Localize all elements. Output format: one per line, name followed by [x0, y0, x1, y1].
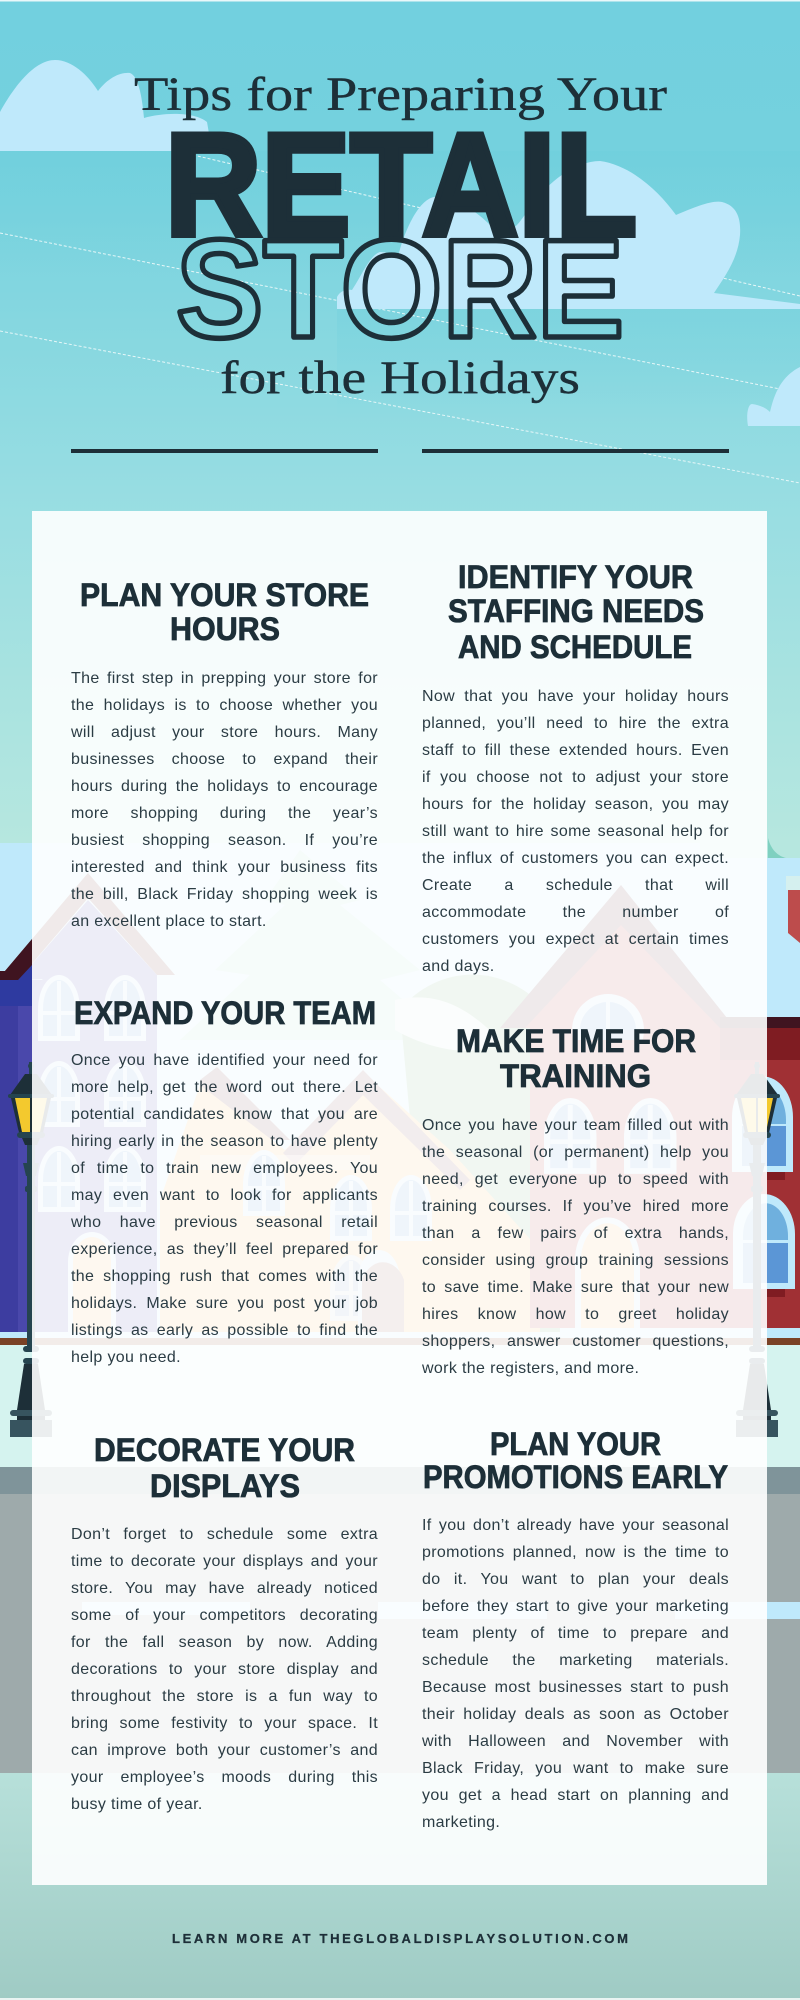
body text: the influx of customers you can expect. — [422, 850, 729, 867]
body text: schedule the marketing materials. — [422, 1652, 729, 1669]
body text — [422, 688, 729, 975]
body text: accommodate the number of — [422, 904, 729, 921]
body text: experience, as they’ll feel prepared for — [71, 1241, 378, 1258]
body text: you get a head start on planning and — [422, 1787, 729, 1804]
right windows — [732, 1076, 795, 1297]
heading: AND SCHEDULE — [458, 629, 692, 665]
body text: can improve both your customer’s and — [71, 1742, 378, 1759]
section: expand your team — [71, 995, 378, 1366]
body text — [71, 1526, 378, 1813]
body text: if you choose not to adjust your store — [422, 769, 729, 786]
body text — [71, 670, 378, 930]
body text: before they start to give your marketing — [422, 1598, 729, 1615]
body text: and days. — [422, 958, 495, 975]
street lamp: right — [734, 1062, 780, 1437]
body text: consider using group training sessions — [422, 1252, 729, 1269]
body text: Black Friday, you want to make sure — [422, 1760, 729, 1777]
green tree — [400, 975, 560, 1335]
body text: the holidays is to choose whether you — [71, 697, 378, 714]
cloud: upper left — [0, 60, 212, 151]
body text: than a few pairs of extra hands, — [422, 1225, 729, 1242]
body text: to save time. Make sure that your new — [422, 1279, 729, 1296]
body text: bring some festivity to your space. It — [71, 1715, 378, 1732]
body text: interested and think your business fits — [71, 859, 378, 876]
body text: busiest shopping season. If you’re — [71, 832, 378, 849]
title block — [71, 68, 729, 453]
body text: hires know how to greet holiday — [422, 1306, 729, 1323]
section: make time for training — [422, 1023, 729, 1377]
heading: STAFFING NEEDS — [448, 593, 704, 629]
body text: do it. You want to plan your deals — [422, 1571, 729, 1588]
body text: Create a schedule that will — [422, 877, 729, 894]
blue house — [0, 873, 175, 1332]
cloud: right edge — [747, 367, 800, 426]
body text: who have previous seasonal retail — [71, 1214, 378, 1231]
body text: the seasonal (or permanent) help you — [422, 1144, 729, 1161]
heading: HOURS — [170, 611, 280, 647]
body text: work the registers, and more. — [422, 1360, 639, 1377]
body text: some of your competitors decorating — [71, 1607, 378, 1624]
footer call to action: LEARN MORE AT THEGLOBALDISPLAYSOLUTION.COM — [172, 1931, 628, 1946]
body text: time to decorate your displays and your — [71, 1553, 378, 1570]
cloud: centre right — [337, 161, 800, 309]
body text: still want to hire some seasonal help for — [422, 823, 729, 840]
heading: EXPAND YOUR TEAM — [74, 995, 376, 1031]
body text: customers you expect at certain times — [422, 931, 729, 948]
body text: businesses choose to expand their — [71, 751, 378, 768]
heading: PROMOTIONS EARLY — [423, 1459, 728, 1495]
heading: IDENTIFY YOUR — [458, 559, 693, 595]
street lamp: left — [8, 1062, 54, 1437]
body text: may even want to look for applicants — [71, 1187, 378, 1204]
section: plan your store hours — [71, 577, 378, 930]
body text: The first step in prepping your store for — [71, 670, 378, 687]
body text: team plenty of time to prepare and — [422, 1625, 729, 1642]
red house — [500, 885, 800, 1328]
body text: planned, you’ll need to hire the extra — [422, 715, 729, 732]
body text: throughout the store is a fun way to — [71, 1688, 378, 1705]
body text: Because most businesses start to push — [422, 1679, 729, 1696]
section: plan your promotions early — [422, 1426, 729, 1831]
body text: the shopping rush that comes with the — [71, 1268, 378, 1285]
body text: holidays. Make sure you post your job — [71, 1295, 378, 1312]
section: identify your staffing needs — [422, 559, 729, 975]
body text: Now that you have your holiday hours — [422, 688, 729, 705]
body text: staff to fill these extended hours. Even — [422, 742, 729, 759]
heading — [423, 1426, 728, 1495]
body text: need, get everyone up to speed with — [422, 1171, 729, 1188]
body text: promotions planned, now is the time to — [422, 1544, 729, 1561]
body text: of time to train new employees. You — [71, 1160, 378, 1177]
heading: DECORATE YOUR — [94, 1432, 355, 1468]
heading: PLAN YOUR STORE — [80, 577, 369, 613]
body text: store. You may have already noticed — [71, 1580, 378, 1597]
heading — [456, 1023, 696, 1094]
body text — [422, 1117, 729, 1377]
body text: shoppers, answer customer questions, — [422, 1333, 729, 1350]
body text: marketing. — [422, 1814, 500, 1831]
body text: help you need. — [71, 1349, 181, 1366]
body text: Don’t forget to schedule some extra — [71, 1526, 378, 1543]
panel: white content card — [32, 511, 767, 1885]
title line: for the Holidays: for the Holidays — [220, 352, 580, 404]
heading: PLAN YOUR — [490, 1426, 661, 1462]
body text: busy time of year. — [71, 1796, 203, 1813]
sky behind the street — [0, 843, 800, 1343]
heading — [448, 559, 704, 665]
body text: with Halloween and November with — [422, 1733, 729, 1750]
sidewalk and road — [0, 1332, 800, 2000]
chimney right — [786, 876, 800, 943]
body text: Once you have your team filled out with — [422, 1117, 729, 1134]
title line: RETAIL: RETAIL — [165, 103, 637, 266]
section: decorate your displays — [71, 1432, 378, 1813]
body text: hiring early in the season to have plenty — [71, 1133, 378, 1150]
body text — [71, 1052, 378, 1366]
body text: for the fall season by now. Adding — [71, 1634, 378, 1651]
heading: TRAINING — [500, 1058, 651, 1094]
body text: more shopping during the year’s — [71, 805, 378, 822]
title line: Tips for Preparing Your: Tips for Preparing Your — [134, 68, 667, 121]
heading: MAKE TIME FOR — [456, 1023, 696, 1059]
body text: training courses. If you’ve hired more — [422, 1198, 729, 1215]
body text: the bill, Black Friday shopping week is — [71, 886, 378, 903]
body text: potential candidates know that you are — [71, 1106, 378, 1123]
body text: their holiday deals as soon as October — [422, 1706, 729, 1723]
body text: If you don’t already have your seasonal — [422, 1517, 729, 1534]
body text: will adjust your store hours. Many — [71, 724, 378, 741]
heading — [80, 577, 369, 647]
divider rules — [71, 449, 729, 453]
heading: DISPLAYS — [150, 1468, 300, 1504]
body text: decorations to your store display and — [71, 1661, 378, 1678]
body text: hours for the holiday season, you may — [422, 796, 729, 813]
distant teal tree — [180, 850, 450, 1040]
heading — [94, 1432, 355, 1504]
body text: more help, get the word out there. Let — [71, 1079, 378, 1096]
body text — [422, 1517, 729, 1831]
body text: your employee’s moods during this — [71, 1769, 378, 1786]
body text: Once you have identified your need for — [71, 1052, 378, 1069]
body text: an excellent place to start. — [71, 913, 267, 930]
body text: hours during the holidays to encourage — [71, 778, 378, 795]
orange house — [160, 1067, 540, 1335]
title line: STORE outlined: STORE — [176, 210, 624, 367]
body text: listings as early as possible to find the — [71, 1322, 378, 1339]
